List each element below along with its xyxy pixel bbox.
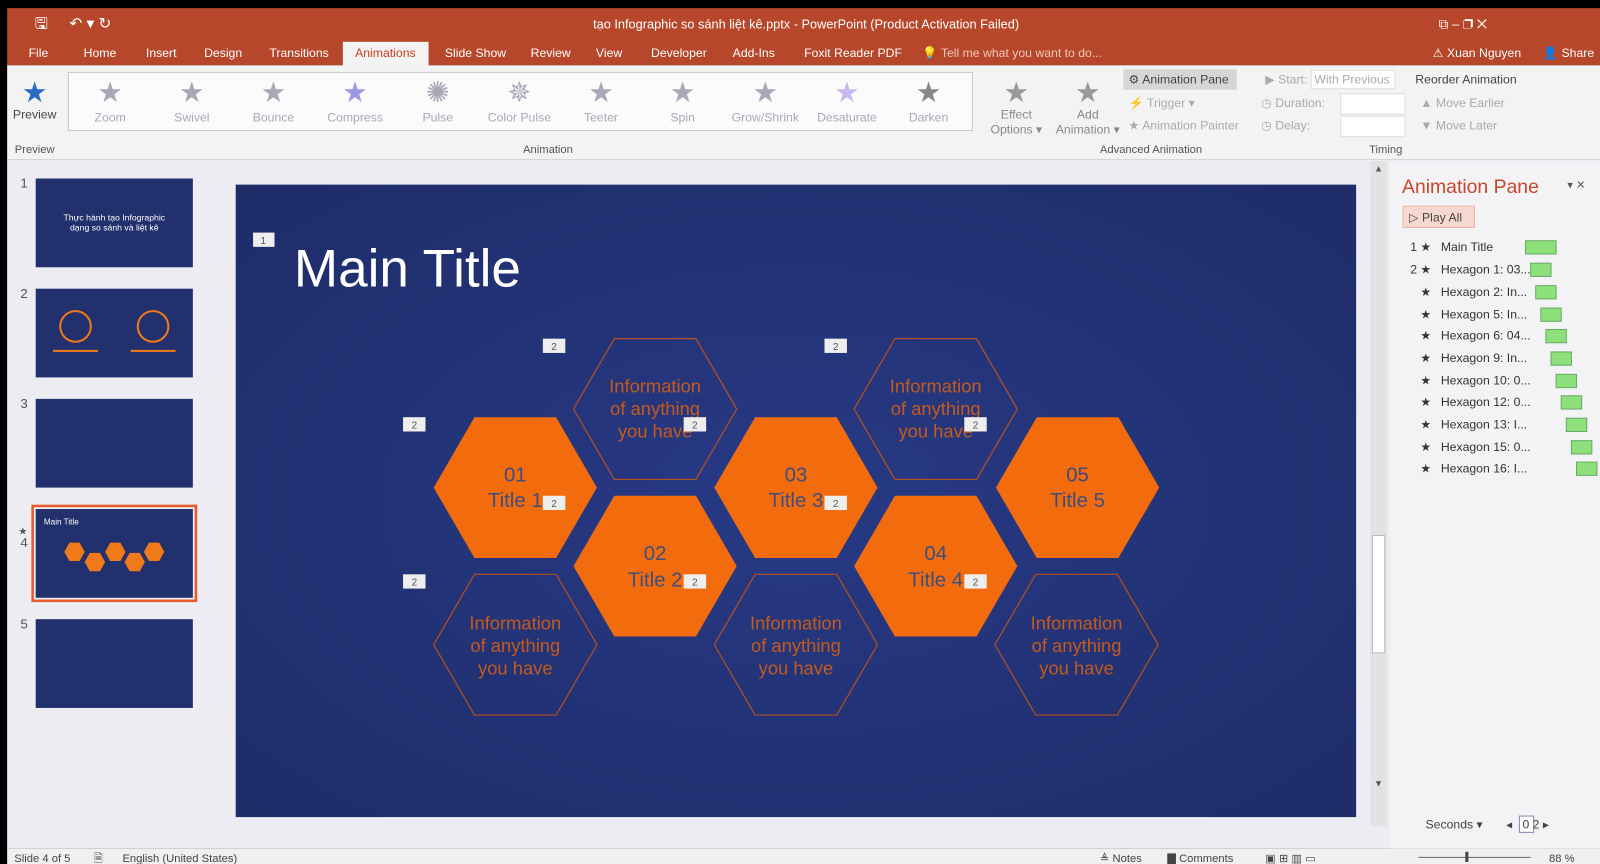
animation tags: 2 bbox=[551, 342, 557, 353]
scrollbar: ▲ bbox=[1374, 163, 1383, 173]
orange hexagons: 01 bbox=[504, 464, 527, 486]
animation pane: Hexagon 10: 0... bbox=[1441, 374, 1531, 388]
orange hexagons: Title 4 bbox=[908, 570, 963, 592]
ribbon: ★ bbox=[834, 77, 860, 109]
orange hexagons: 05 bbox=[1066, 464, 1089, 486]
animation pane: Hexagon 1: 03... bbox=[1441, 262, 1531, 276]
orange hexagons: Title 1 bbox=[488, 490, 543, 512]
animation pane: 1 ★ bbox=[1410, 240, 1431, 254]
thumbnail pane: Main Title bbox=[44, 517, 79, 526]
animation pane: Hexagon 5: In... bbox=[1441, 307, 1527, 321]
slide: you have bbox=[759, 657, 833, 678]
slide: you have bbox=[1039, 657, 1114, 678]
animation tags: 2 bbox=[411, 578, 417, 589]
ribbon: Animation bbox=[523, 144, 573, 156]
ribbon: ⚡ Trigger ▾ bbox=[1129, 95, 1195, 111]
title bar: ⧉ – ❐ ✕ bbox=[1439, 17, 1487, 32]
main area background bbox=[7, 159, 1600, 849]
ribbon: Timing bbox=[1369, 144, 1402, 156]
animation pane: Main Title bbox=[1441, 240, 1493, 254]
slide: you have bbox=[898, 421, 973, 442]
ribbon: ★ bbox=[670, 77, 695, 109]
ribbon: ✵ bbox=[507, 77, 531, 109]
animation pane: ★ bbox=[1420, 307, 1431, 321]
ribbon: ★ bbox=[588, 77, 614, 109]
main title: Main Title bbox=[294, 240, 521, 299]
animation pane: ★ bbox=[1420, 285, 1431, 299]
ribbon: Pulse bbox=[422, 110, 453, 124]
animation pane: Hexagon 16: I... bbox=[1441, 461, 1527, 475]
ribbon tabs: ⚠ Xuan Nguyen bbox=[1433, 46, 1521, 60]
thumbnail pane: 4 bbox=[20, 535, 28, 550]
thumbnail pane: Thực hành tạo Infographic bbox=[63, 212, 166, 222]
animation pane: Hexagon 2: In... bbox=[1441, 285, 1527, 299]
ribbon bbox=[7, 65, 1600, 159]
animation pane: Seconds ▾ bbox=[1426, 817, 1483, 831]
ribbon tabs: Foxit Reader PDF bbox=[804, 46, 902, 60]
animation tags: 2 bbox=[551, 499, 557, 510]
ribbon tabs bbox=[29, 42, 1594, 66]
ribbon: Preview bbox=[15, 144, 56, 156]
orange hexagons: Title 5 bbox=[1050, 490, 1105, 512]
ribbon: With Previous bbox=[1314, 73, 1390, 87]
thumbnail pane bbox=[18, 176, 196, 708]
ribbon: ⚙ Animation Pane bbox=[1129, 73, 1229, 87]
ribbon: ★ bbox=[916, 77, 941, 109]
ribbon tabs: Add-Ins bbox=[733, 46, 775, 60]
slide: of anything bbox=[891, 398, 981, 419]
thumbnail pane: 5 bbox=[20, 616, 28, 631]
ribbon tabs: View bbox=[596, 46, 622, 60]
slide: of anything bbox=[470, 635, 560, 656]
ribbon: ★ bbox=[22, 77, 47, 109]
ribbon tabs: Developer bbox=[651, 46, 707, 60]
scrollbar: ▼ bbox=[1374, 778, 1383, 788]
orange hexagons: 03 bbox=[785, 464, 807, 486]
thumbnail pane: 1 bbox=[20, 176, 28, 191]
animation pane: ★ bbox=[1420, 374, 1431, 388]
slide: Information bbox=[890, 376, 982, 397]
ribbon: Zoom bbox=[95, 110, 126, 124]
animation tags: 2 bbox=[411, 420, 417, 431]
status bar bbox=[7, 849, 1600, 864]
animation pane: ▾ ✕ bbox=[1567, 180, 1586, 192]
ribbon: Effect bbox=[1001, 107, 1032, 121]
slide: of anything bbox=[751, 635, 841, 656]
ribbon: Add bbox=[1077, 107, 1099, 121]
thumbnail pane: ★ bbox=[18, 527, 28, 538]
orange hexagons: Title 3 bbox=[769, 490, 823, 512]
animation tags: 2 bbox=[973, 578, 979, 589]
ribbon: ★ bbox=[342, 77, 368, 109]
thumbnail pane: 2 bbox=[20, 286, 28, 301]
title bar: ↶ ▾ ↻ bbox=[69, 16, 111, 33]
animation pane: ★ bbox=[1420, 440, 1431, 454]
thumbnail pane: 3 bbox=[20, 396, 28, 411]
animation pane: ★ bbox=[1420, 417, 1431, 431]
ribbon: Grow/Shrink bbox=[732, 110, 800, 124]
animation pane: 0 2 ▸ bbox=[1522, 817, 1549, 831]
animation pane: ◂ bbox=[1506, 817, 1512, 831]
ribbon: Compress bbox=[327, 110, 383, 124]
ribbon: ★ bbox=[753, 77, 778, 109]
animation pane: Hexagon 9: In... bbox=[1441, 351, 1527, 365]
slide: you have bbox=[618, 421, 692, 442]
ribbon: ★ bbox=[1004, 77, 1029, 109]
ribbon: Desaturate bbox=[817, 110, 877, 124]
title bar: 🖫 bbox=[35, 16, 48, 33]
animation pane bbox=[1390, 161, 1600, 849]
ribbon: Color Pulse bbox=[488, 110, 551, 124]
ribbon tabs: Transitions bbox=[269, 46, 329, 60]
ribbon: Preview bbox=[13, 107, 57, 121]
ribbon: Reorder Animation bbox=[1415, 73, 1517, 87]
orange hexagons: Title 2 bbox=[628, 570, 682, 592]
ribbon: ✺ bbox=[426, 77, 450, 109]
ribbon: Options ▾ bbox=[990, 123, 1042, 137]
orange hexagons: 02 bbox=[644, 543, 666, 565]
animation tags bbox=[403, 339, 987, 589]
animation tags: 2 bbox=[692, 420, 698, 431]
ribbon: Animation ▾ bbox=[1056, 123, 1120, 137]
slide: you have bbox=[478, 657, 553, 678]
slide: Information bbox=[750, 612, 842, 633]
ribbon: ▶ Start: bbox=[1265, 73, 1307, 87]
ribbon: Darken bbox=[909, 110, 948, 124]
animation pane: Hexagon 13: I... bbox=[1441, 417, 1527, 431]
ribbon: ★ bbox=[179, 77, 205, 109]
slide: of anything bbox=[610, 398, 700, 419]
ribbon: Swivel bbox=[174, 110, 210, 124]
orange hexagons bbox=[434, 417, 1159, 637]
ribbon: ★ bbox=[97, 77, 123, 109]
outline hexagons bbox=[434, 339, 1158, 715]
slide: Information bbox=[1031, 612, 1122, 633]
animation pane: Animation Pane bbox=[1402, 176, 1539, 198]
animation pane: ▷ Play All bbox=[1409, 210, 1462, 224]
orange hexagons: 04 bbox=[924, 543, 947, 565]
ribbon: Spin bbox=[670, 110, 695, 124]
animation tags: 2 bbox=[833, 342, 839, 353]
ribbon tabs: File bbox=[29, 46, 48, 60]
slide: Information bbox=[609, 376, 701, 397]
animation pane: ★ bbox=[1420, 395, 1431, 409]
thumbnail pane: dạng so sánh và liệt kê bbox=[70, 223, 159, 233]
slide: of anything bbox=[1032, 635, 1121, 656]
ribbon tabs: Animations bbox=[355, 46, 416, 60]
animation pane: ★ bbox=[1420, 329, 1431, 343]
animation pane: 2 ★ bbox=[1410, 262, 1431, 276]
ribbon tabs: Slide Show bbox=[445, 46, 506, 60]
ribbon: ◷ Delay: bbox=[1261, 119, 1310, 133]
slide: Information bbox=[469, 612, 561, 633]
animation tags: 2 bbox=[973, 420, 979, 431]
ribbon: Bounce bbox=[253, 110, 294, 124]
animation pane: Hexagon 6: 04... bbox=[1441, 329, 1531, 343]
animation pane: Hexagon 12: 0... bbox=[1441, 395, 1531, 409]
ribbon: ★ bbox=[1075, 77, 1101, 109]
ribbon tabs: Home bbox=[84, 46, 117, 60]
animation pane: ★ bbox=[1420, 461, 1431, 475]
scrollbar bbox=[1370, 161, 1387, 826]
title bar bbox=[7, 8, 1600, 65]
ribbon tabs: Design bbox=[204, 46, 242, 60]
animation tags: 2 bbox=[692, 578, 698, 589]
animation tags: 2 bbox=[833, 499, 839, 510]
title bar: tạo Infographic so sánh liệt kê.pptx - PowerPoint (Product Activation Failed) bbox=[593, 17, 1019, 32]
ribbon: ◷ Duration: bbox=[1261, 96, 1325, 110]
animation pane: Hexagon 15: 0... bbox=[1441, 440, 1531, 454]
slide bbox=[236, 185, 1356, 817]
ribbon: ★ bbox=[261, 77, 286, 109]
ribbon: ▼ Move Later bbox=[1420, 119, 1497, 133]
ribbon tabs: 👤 Share bbox=[1543, 45, 1594, 60]
ribbon: ★ Animation Painter bbox=[1129, 119, 1239, 133]
ribbon: Advanced Animation bbox=[1100, 144, 1202, 156]
slide: 1 bbox=[260, 236, 266, 247]
animation pane: ★ bbox=[1420, 351, 1431, 365]
ribbon tabs: 💡 Tell me what you want to do... bbox=[922, 45, 1102, 60]
ribbon: ▲ Move Earlier bbox=[1420, 96, 1505, 110]
ribbon: Teeter bbox=[584, 110, 618, 124]
ribbon tabs: Insert bbox=[146, 46, 177, 60]
ribbon tabs: Review bbox=[531, 46, 571, 60]
